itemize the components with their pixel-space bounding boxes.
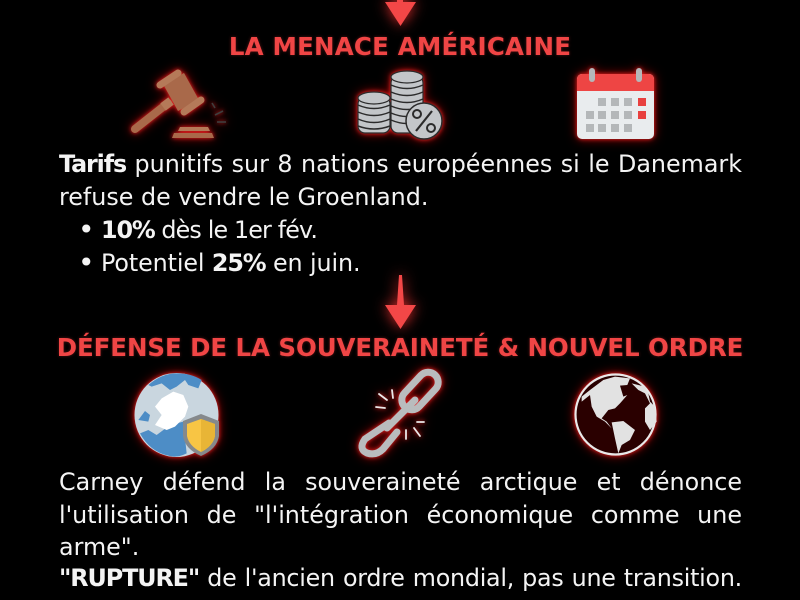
text block: carney: Carney défend la souveraineté arctique et dénonce xyxy=(59,468,742,496)
icon: coins with percent xyxy=(349,62,450,148)
text block: tarifs: • xyxy=(78,213,95,246)
icon: arctic globe with shield xyxy=(126,365,228,465)
icon: calendar xyxy=(568,62,662,148)
text block: carney: l'utilisation de "l'intégration économique comme une xyxy=(59,501,742,529)
icon: broken chain xyxy=(351,361,450,465)
icon: gavel xyxy=(124,63,230,146)
text block: tarifs: refuse de vendre le Groenland. xyxy=(59,183,428,211)
arrow: top xyxy=(378,0,423,32)
text block: tarifs: • xyxy=(78,246,95,279)
heading: défense de la souveraineté: DÉFENSE DE LA SOUVERAINETÉ & NOUVEL ORDRE xyxy=(57,333,743,362)
text block: tarifs xyxy=(59,150,742,279)
text block: carney: arme". xyxy=(59,533,139,561)
arrow: middle xyxy=(378,269,423,336)
text block: tarifs: 10% dès le 1er fév. xyxy=(101,216,317,244)
icon: world globe xyxy=(566,365,665,464)
text block: tarifs: Tarifs punitifs sur 8 nations européennes si le Danemark xyxy=(59,150,742,178)
text block: carney: "RUPTURE" de l'ancien ordre mondial, pas une transition. xyxy=(59,564,742,592)
text block: tarifs: Potentiel 25% en juin. xyxy=(101,249,360,277)
text block: carney xyxy=(59,468,742,592)
heading: la menace américaine: LA MENACE AMÉRICAINE xyxy=(229,32,571,61)
